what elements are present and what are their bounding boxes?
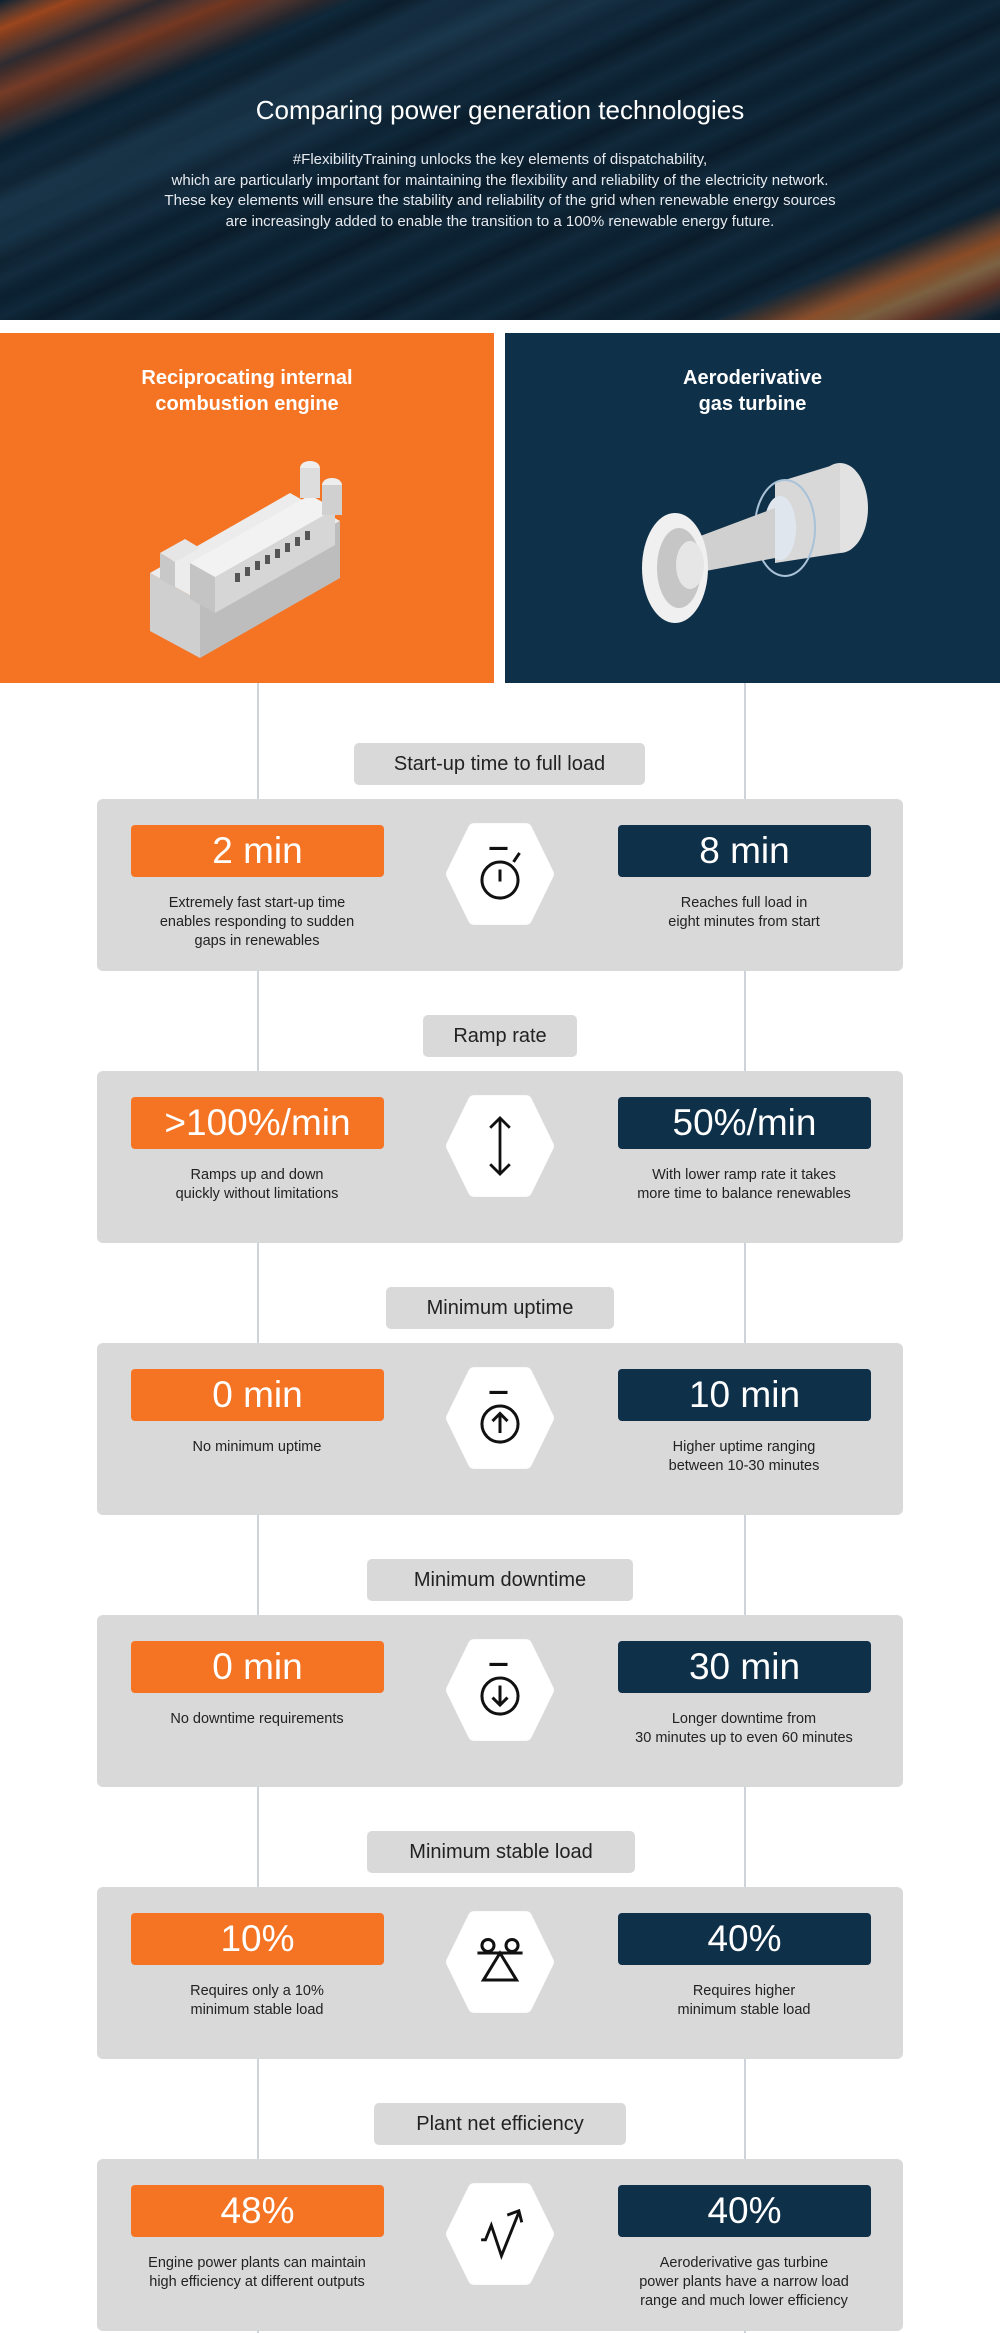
value: turbine: 10 min (689, 1374, 800, 1415)
label (423, 1015, 577, 1057)
heading: engine: combustion engine (155, 393, 339, 415)
value: engine: 0 min (212, 1374, 303, 1415)
value: turbine: 40% (707, 2190, 782, 2231)
value: turbine: 40% (707, 1918, 782, 1959)
intro text (164, 151, 836, 230)
text: engine: No minimum uptime (193, 1439, 321, 1455)
intro text: #FlexibilityTraining unlocks the key elements of dispatchability, (293, 151, 707, 168)
value: engine: 10% (220, 1918, 295, 1959)
text: turbine: between 10-30 minutes (669, 1458, 819, 1474)
section: minimum uptime (97, 1287, 903, 1515)
text: turbine: minimum stable load (678, 2002, 810, 2018)
panel: reciprocating engine (0, 333, 494, 683)
intro text: which are particularly important for maintaining the flexibility and reliability of the electricity network. (172, 172, 828, 188)
label (367, 1559, 633, 1601)
header banner (0, 0, 1000, 320)
heading: turbine: Aeroderivative (683, 367, 822, 389)
heading: turbine (683, 367, 822, 415)
panel: gas turbine (505, 333, 1000, 683)
text: turbine (639, 2255, 849, 2309)
text: turbine: 30 minutes up to even 60 minutes (635, 1730, 853, 1746)
label: Ramp rate (453, 1025, 547, 1047)
comparison panel (97, 1615, 903, 1787)
value: engine (131, 1641, 384, 1693)
text: turbine: Aeroderivative gas turbine (660, 2255, 828, 2271)
value: engine: 0 min (212, 1646, 303, 1687)
section: plant net efficiency (97, 2103, 903, 2331)
heading: engine: Reciprocating internal (141, 367, 353, 389)
text: turbine: range and much lower efficiency (640, 2293, 848, 2309)
comparison panel (97, 1887, 903, 2059)
heading: engine (141, 367, 353, 415)
text: engine: Requires only a 10% (190, 1983, 324, 1999)
text: engine (148, 2255, 366, 2290)
label: Plant net efficiency (416, 2113, 584, 2135)
value: turbine: 8 min (699, 830, 790, 871)
value: engine (131, 1369, 384, 1421)
text: engine: high efficiency at different outputs (149, 2274, 365, 2290)
label: Minimum uptime (427, 1297, 573, 1319)
text: turbine (635, 1711, 853, 1746)
value: engine (131, 1097, 384, 1149)
value: turbine: 30 min (689, 1646, 800, 1687)
value: turbine (618, 1641, 871, 1693)
text: engine: minimum stable load (190, 2002, 323, 2018)
section: start-up time (97, 743, 903, 971)
icon: up-down arrow (446, 1095, 554, 1197)
value: turbine: 50%/min (673, 1102, 816, 1143)
text: turbine (668, 895, 820, 930)
text: turbine: eight minutes from start (668, 914, 820, 930)
comparison panel (97, 1071, 903, 1243)
value: engine: 2 min (212, 830, 303, 871)
comparison panel (97, 1343, 903, 1515)
title: Comparing power generation technologies (256, 95, 744, 125)
text: turbine: Reaches full load in (681, 895, 807, 911)
value: turbine (618, 1097, 871, 1149)
value: engine (131, 825, 384, 877)
value: turbine (618, 2185, 871, 2237)
text: turbine: With lower ramp rate it takes (652, 1167, 836, 1183)
value: engine (131, 1913, 384, 1965)
comparison panel (97, 2159, 903, 2331)
text: engine (160, 895, 354, 949)
value: turbine (618, 1913, 871, 1965)
illustration: engine (150, 461, 342, 658)
value: turbine (618, 825, 871, 877)
text: engine: quickly without limitations (176, 1186, 338, 1202)
text: turbine (678, 1983, 810, 2018)
label: Minimum downtime (414, 1569, 586, 1591)
text: engine: enables responding to sudden (160, 914, 354, 930)
section: minimum downtime (97, 1559, 903, 1787)
heading: turbine: gas turbine (699, 393, 806, 415)
icon: trend arrow (446, 2183, 554, 2285)
label (367, 1831, 635, 1873)
value: engine: 48% (220, 2190, 295, 2231)
label: Start-up time to full load (394, 753, 605, 775)
icon: balance (446, 1911, 554, 2013)
text: engine (190, 1983, 324, 2018)
label: Minimum stable load (409, 1841, 593, 1863)
icon: stopwatch up (446, 1367, 554, 1469)
text: turbine (637, 1167, 851, 1202)
text: engine (176, 1167, 338, 1202)
comparison panel (97, 799, 903, 971)
intro text: are increasingly added to enable the transition to a 100% renewable energy future. (226, 212, 774, 230)
text: turbine: power plants have a narrow load (639, 2274, 849, 2290)
value: engine (131, 2185, 384, 2237)
section: ramp rate (97, 1015, 903, 1243)
text: turbine: more time to balance renewables (637, 1186, 851, 1202)
text: engine: Extremely fast start-up time (169, 895, 345, 911)
label (374, 2103, 626, 2145)
text: engine: No downtime requirements (170, 1711, 344, 1727)
text: turbine: Longer downtime from (672, 1711, 816, 1727)
icon: stopwatch (446, 823, 554, 925)
label (386, 1287, 614, 1329)
text: turbine: Higher uptime ranging (673, 1439, 815, 1455)
value: engine: >100%/min (164, 1102, 351, 1143)
illustration: turbine (642, 463, 868, 623)
text: turbine: Requires higher (693, 1983, 795, 1999)
icon: stopwatch down (446, 1639, 554, 1741)
text: engine: Ramps up and down (190, 1167, 324, 1183)
section: minimum stable load (97, 1831, 903, 2059)
label (354, 743, 645, 785)
value: turbine (618, 1369, 871, 1421)
intro text: These key elements will ensure the stability and reliability of the grid when renewable energy sources (164, 192, 836, 209)
text: turbine (669, 1439, 819, 1474)
text: engine: gaps in renewables (195, 933, 319, 949)
text: engine: Engine power plants can maintain (148, 2255, 366, 2271)
